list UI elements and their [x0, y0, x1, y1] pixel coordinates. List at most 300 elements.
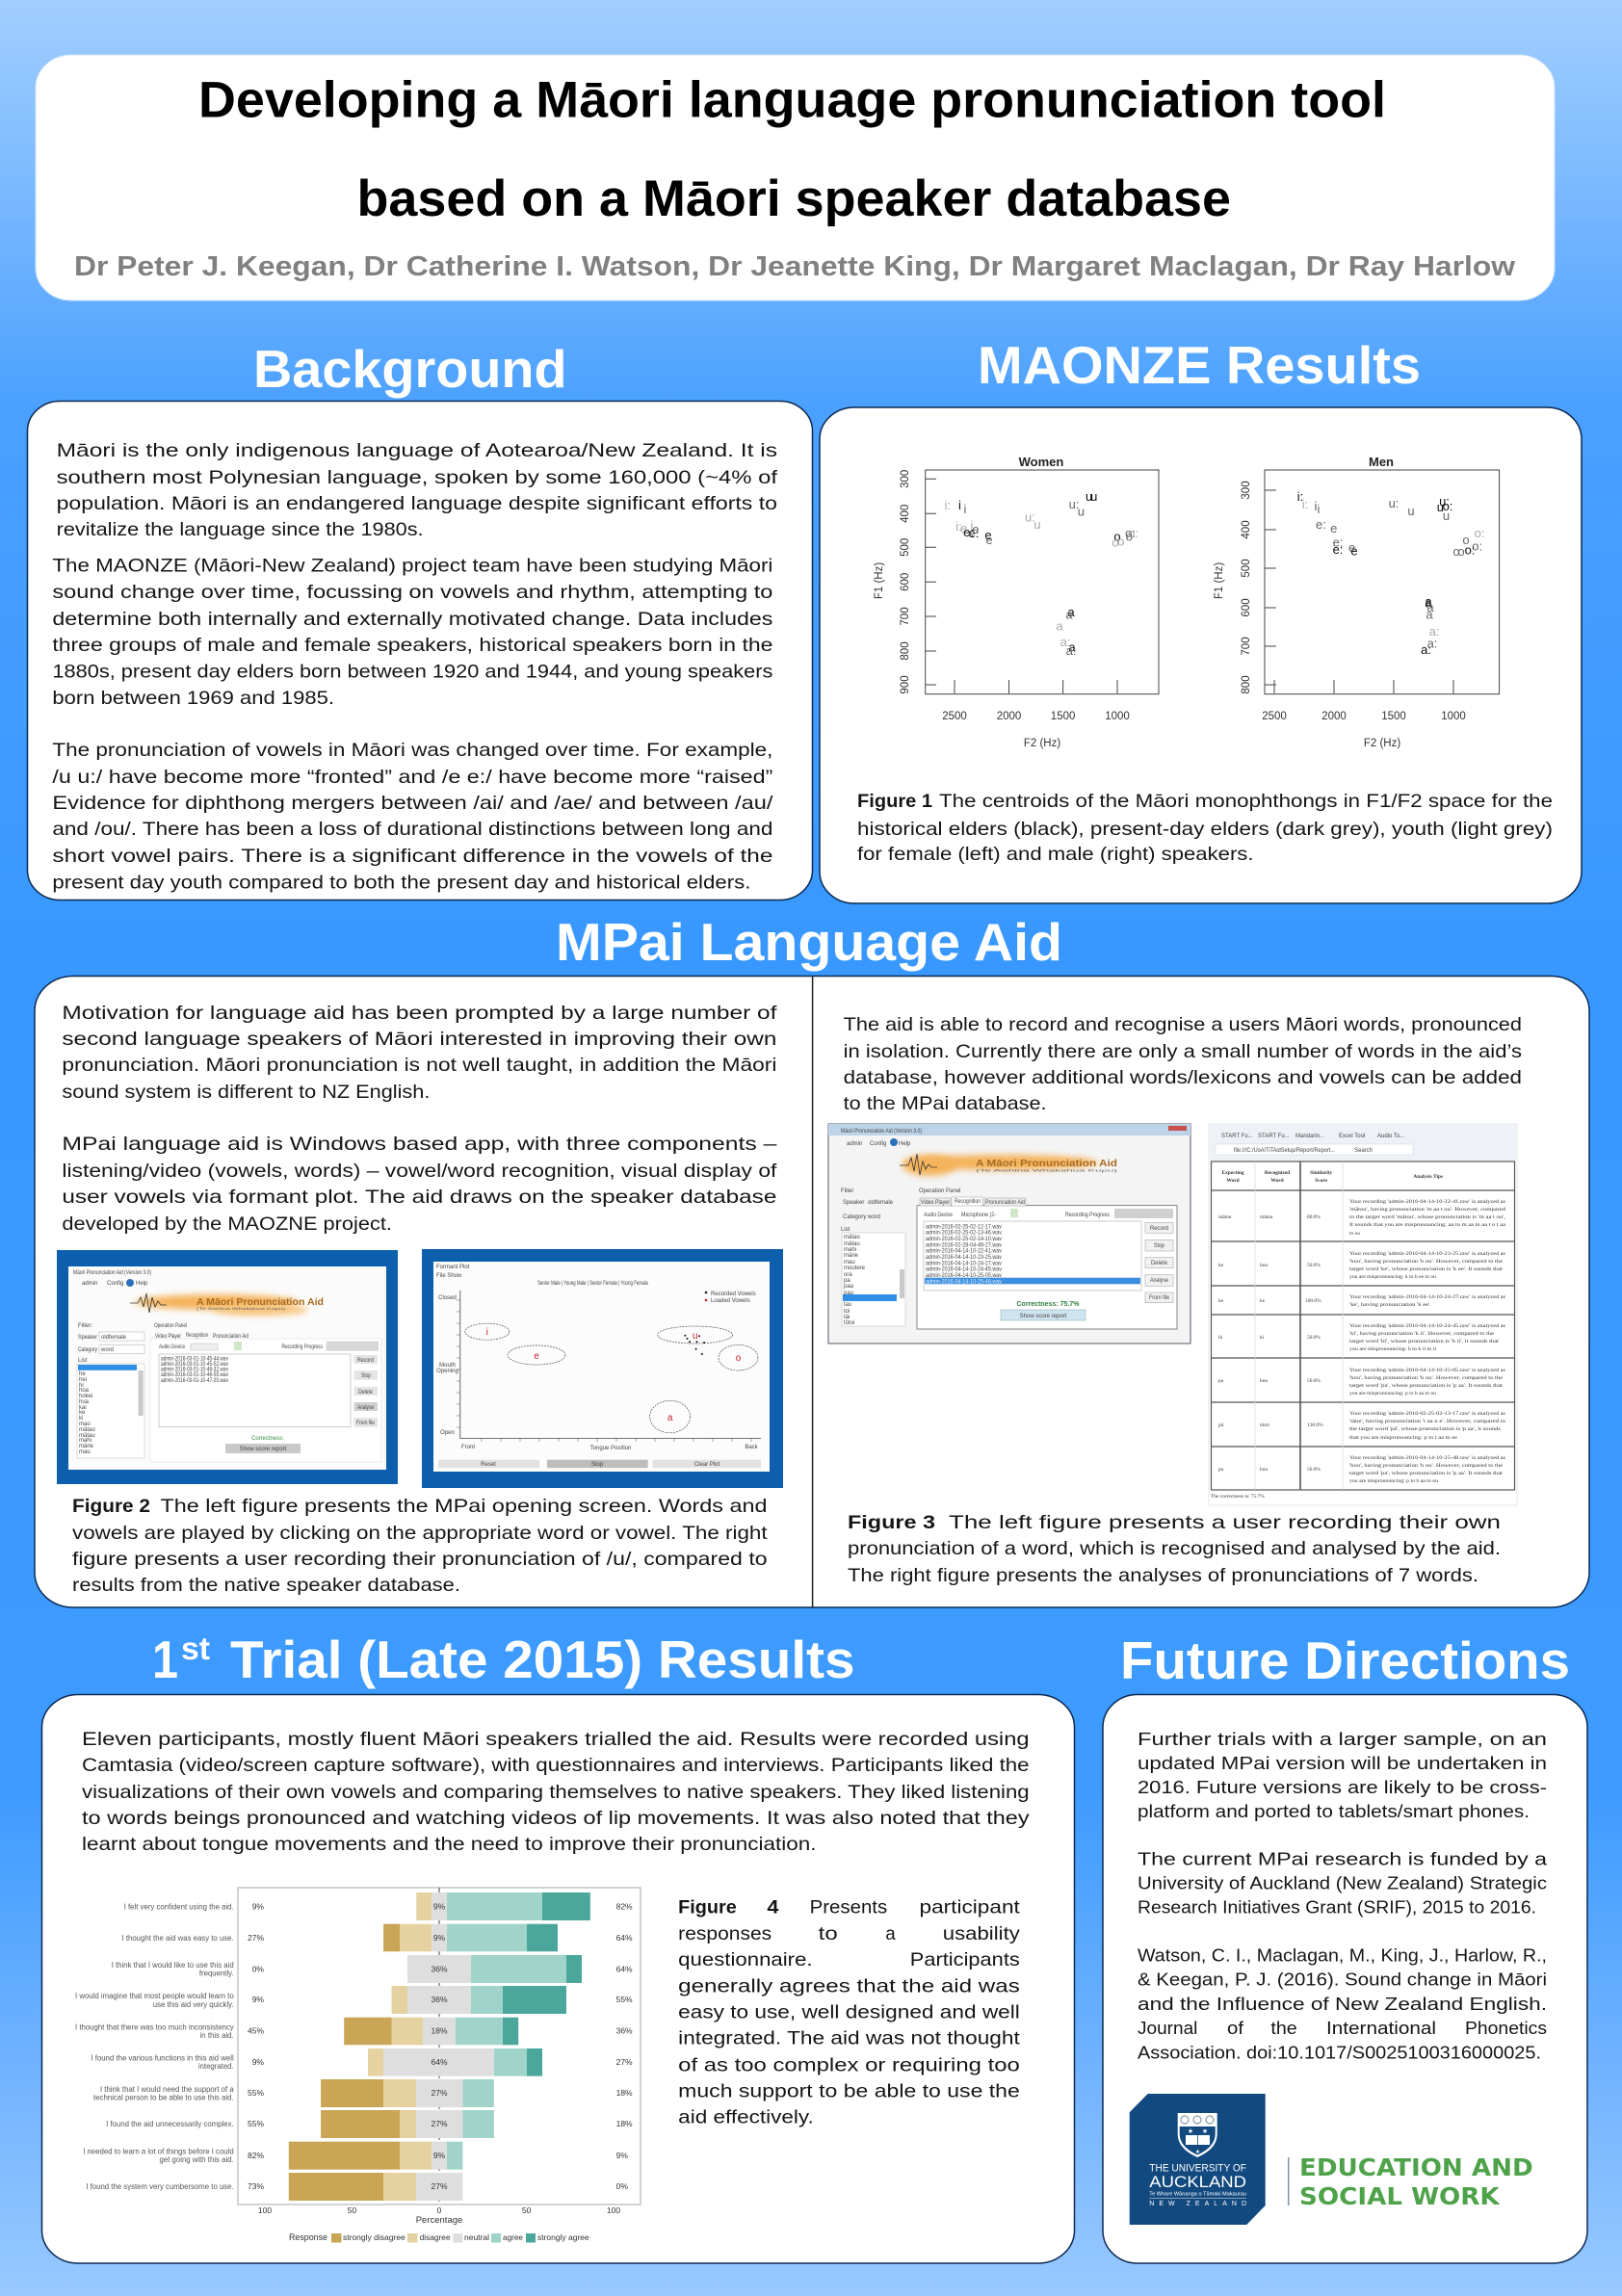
- screenshot: analysis report table: hou: [1260, 1263, 1268, 1268]
- screenshot: analysis report table: Excel Tool: [1339, 1134, 1365, 1139]
- screenshot: MPai opening screen: From file: [356, 1421, 376, 1426]
- axis row labels: in this aid.: [200, 2031, 234, 2040]
- screenshot: MPai opening screen: admin: [82, 1281, 97, 1287]
- percent labels: 64%: [431, 2057, 448, 2067]
- screenshot: formant plot: i: [486, 1327, 488, 1338]
- screenshot: recording window: tāi: [844, 1315, 850, 1320]
- heading: 1st Trial results: Trial (Late 2015) Results: [230, 1630, 855, 1689]
- screenshot: recording window: admin-2016-02-25-02-14-10.wav: [926, 1237, 1002, 1242]
- text: further trials: platform and ported to tablets/smart phones.: [1138, 1801, 1530, 1821]
- legend: strongly disagree: [343, 2232, 406, 2242]
- screenshot: formant plot: e: [534, 1351, 539, 1362]
- percent labels: 0%: [252, 1965, 264, 1974]
- chart: men vowel space: u: [1443, 509, 1450, 523]
- chart: women vowel space: 2000: [997, 711, 1021, 722]
- chart: women vowel space: a: [1056, 619, 1063, 634]
- caption: figure 2: [72, 1496, 768, 1596]
- screenshot: analysis report table: Audio To...: [1377, 1134, 1405, 1139]
- chart: women vowel space: u: [1086, 489, 1092, 504]
- chart: men vowel space: a: [1425, 594, 1432, 609]
- text: vowel change: /u u:/ have become more “fronted” and /e e:/ have become more “raised”: [52, 767, 772, 788]
- chart: men vowel space: u:: [1439, 494, 1450, 509]
- chart: women vowel space: a: [1068, 640, 1076, 655]
- chart: women vowel space: e: [960, 521, 967, 535]
- chart: women vowel space: u:: [1025, 510, 1035, 525]
- text: participants: Camtasia (video/screen capture software), with questionnaires and interviews. Participants liked the: [82, 1755, 1030, 1776]
- chart: women vowel space: u: [1078, 505, 1085, 519]
- screenshot: recording window: mahi: [844, 1247, 856, 1253]
- chart: men vowel space: 1500: [1381, 711, 1406, 722]
- screenshot: MPai opening screen: hua: [79, 1399, 90, 1405]
- caption: figure 4: aid effectively.: [678, 2106, 814, 2127]
- screenshot: recording window: mārie: [844, 1253, 859, 1259]
- text: MAONZE project: three groups of male and female speakers, historical speakers born in the: [52, 635, 772, 656]
- axis ticks: 0: [437, 2205, 442, 2215]
- screenshot: analysis report table: It sounds that you are mispronouncing: aa to m aa to aa t o t aa: [1349, 1222, 1506, 1228]
- screenshot: analysis report table: 50.0%: [1307, 1263, 1321, 1268]
- caption: figure 4: Figure: [678, 1897, 737, 1918]
- legend: strongly agree: [537, 2232, 589, 2242]
- screenshot: MPai opening screen: mārie: [79, 1444, 94, 1449]
- screenshot: MPai opening screen: admin-2016-03-01-10-46-32.wav: [161, 1368, 228, 1373]
- icon: crest: ★: [1202, 2127, 1208, 2135]
- screenshot: analysis report table: 50.0%: [1307, 1335, 1321, 1341]
- text: citation: Phonetics: [1465, 2018, 1547, 2038]
- screenshot: recording window: Config: [870, 1141, 886, 1147]
- screenshot: MPai opening screen: ki: [79, 1416, 83, 1422]
- screenshot: analysis report table: Recognized: [1265, 1170, 1290, 1176]
- screenshot: analysis report table: Your recording 'admin-2016-04-14-10-25-48.raw' is analyzed as: [1349, 1455, 1505, 1461]
- screenshot: MPai opening screen: Stop: [361, 1373, 372, 1379]
- chart: women vowel space: 500: [900, 538, 911, 557]
- screenshot: recording window: Video Player: [921, 1200, 950, 1206]
- caption: figure 4: generally agrees that the aid was: [678, 1976, 1020, 1997]
- screenshot: MPai opening screen: mau: [79, 1449, 91, 1455]
- screenshot: recording window: Operation Panel: [919, 1188, 960, 1194]
- percent labels: 36%: [431, 1995, 448, 2004]
- chart: women vowel space: 2500: [942, 711, 967, 722]
- screenshot: recording window: List: [841, 1227, 850, 1233]
- screenshot: MPai opening screen: A Māori Pronunciation Aid: [196, 1297, 324, 1308]
- screenshot: analysis report table: Word: [1226, 1178, 1240, 1184]
- caption: figure 4: easy to use, well designed and well: [678, 2002, 1020, 2023]
- text: further trials: Further trials with a larger sample, on an: [1138, 1729, 1547, 1749]
- screenshot: formant plot: Tongue Position: [590, 1446, 631, 1451]
- chart: women vowel space: o: [1126, 530, 1133, 544]
- percent labels: 55%: [248, 2088, 264, 2098]
- percent labels: 9%: [252, 1901, 264, 1911]
- heading: 1st Trial results: st: [181, 1631, 210, 1666]
- chart: men vowel space: o:: [1475, 526, 1484, 540]
- screenshot: MPai opening screen: admin-2016-03-01-10-47-20.wav: [161, 1378, 228, 1384]
- screenshot: MPai opening screen: [57, 1250, 398, 1484]
- percent labels: 55%: [248, 2119, 264, 2128]
- text: citation: the: [1270, 2018, 1297, 2038]
- screenshot: MPai opening screen: word: [100, 1347, 114, 1353]
- screenshot: MPai opening screen: Correctness:: [251, 1436, 284, 1442]
- legend: disagree: [420, 2232, 451, 2242]
- axis ticks: Percentage: [416, 2215, 462, 2226]
- chart: men vowel space: e: [1330, 521, 1337, 535]
- screenshot: formant plot: Senior Male | Young Male | Senior Female | Young Female: [537, 1281, 648, 1287]
- chart: men vowel space: a:: [1427, 637, 1437, 651]
- screenshot: analysis report table: 100.0%: [1305, 1298, 1321, 1304]
- text: participants: to words beings pronounced and watching videos of lip movements. It was also noted that they: [82, 1808, 1030, 1829]
- percent labels: 82%: [616, 1901, 633, 1911]
- chart: women vowel space: i: [964, 502, 967, 516]
- screenshot: recording window: Record: [1150, 1226, 1168, 1232]
- text: MAONZE project: determine both internally and externally motivated change. Data includes: [52, 609, 773, 630]
- screenshot: recording window: From file: [1149, 1295, 1170, 1301]
- screenshot: MPai opening screen: Operation Panel: [154, 1323, 187, 1329]
- text: further trials: updated MPai version will be undertaken in: [1138, 1753, 1547, 1773]
- text: citation: [1138, 1945, 1547, 2063]
- percent labels: 64%: [616, 1965, 633, 1974]
- caption: figure 4: much support to be able to use the: [678, 2080, 1020, 2101]
- screenshot: analysis report table: ke: [1218, 1298, 1224, 1304]
- screenshot: recording window: admin-2016-04-14-10-23-25.wav: [926, 1255, 1002, 1261]
- caption: figure 4: questionnaire.: [678, 1949, 813, 1970]
- caption: figure 1: Figure 1: [857, 791, 932, 812]
- text: citation: Association. doi:10.1017/S0025100316000025.: [1138, 2043, 1541, 2063]
- axis row labels: frequently.: [199, 1969, 234, 1978]
- screenshot: MPai opening screen: oldfemale: [101, 1335, 127, 1341]
- screenshot: recording window: admin-2016-04-14-10-24-27.wav: [926, 1261, 1002, 1266]
- chart: women vowel space: a:: [1066, 643, 1076, 658]
- text: citation: International: [1326, 2018, 1436, 2038]
- heading: MPai Language Aid: MPai Language Aid: [556, 912, 1062, 972]
- legend: agree: [503, 2232, 523, 2242]
- screenshot: MPai opening screen: Recognition: [186, 1333, 208, 1339]
- screenshot: analysis report table: mātou: [1218, 1214, 1232, 1220]
- screenshot: formant plot: Loaded Vowels: [711, 1298, 750, 1304]
- screenshot: analysis report table: Your recording 'admin-2016-04-14-10-23-25.raw' is analyzed as: [1349, 1251, 1505, 1257]
- legend: neutral: [464, 2232, 489, 2242]
- percent labels: [248, 1901, 633, 2191]
- screenshot: analysis report table: 130.0%: [1307, 1422, 1323, 1428]
- chart: women vowel space: i: [971, 518, 974, 533]
- screenshot: recording window: admin-2016-02-28-04-49-27.wav: [926, 1242, 1002, 1248]
- axis row labels: I found the various functions in this aid well: [91, 2053, 234, 2063]
- chart: women vowel space: e: [972, 522, 980, 536]
- screenshot: analysis report table: Expecting: [1221, 1170, 1244, 1176]
- screenshot: analysis report table: you are mispronouncing: p to h aa to ou: [1349, 1391, 1436, 1396]
- screenshot: MPai opening screen: Recording Progress: [281, 1344, 323, 1350]
- chart: women vowel space: F2 (Hz): [1024, 738, 1060, 749]
- screenshot: analysis report table: [1209, 1124, 1517, 1505]
- chart: women vowel space: 800: [900, 641, 911, 661]
- title: based on a Māori speaker database: [356, 170, 1231, 227]
- authors: Dr Peter J. Keegan, Dr Catherine I. Watson, Dr Jeanette King, Dr Margaret Maclagan, Dr Ray Harlow: [74, 251, 1515, 282]
- title: Developing a Māori language pronunciation tool: [198, 72, 1386, 129]
- screenshot: recording window: admin: [847, 1141, 862, 1147]
- screenshot: analysis report table: to the target word 'mātou', whose pronunciation is 'm aa t ou',: [1349, 1214, 1506, 1220]
- chart: men vowel space: a: [1426, 600, 1434, 614]
- chart: men vowel space: o:: [1472, 539, 1482, 554]
- screenshot: formant plot: u: [693, 1331, 697, 1342]
- chart: men vowel space: 700: [1241, 637, 1252, 656]
- percent labels: 0%: [616, 2181, 628, 2191]
- axis row labels: I think that I would like to use this aid: [112, 1961, 234, 1970]
- screenshot: analysis report table: START Fo...: [1258, 1134, 1290, 1139]
- caption: figure 3: Figure 3: [848, 1512, 935, 1533]
- panel: MAONZE results: [820, 407, 1582, 903]
- screenshot: recording window: Delete: [1151, 1261, 1168, 1266]
- chart: men vowel space: o: [1457, 544, 1465, 559]
- screenshot: MPai opening screen: Config: [107, 1281, 123, 1287]
- text: participants: visualizations of their own vowels and comparing themselves to native speakers. They liked listening: [82, 1782, 1030, 1803]
- chart: women vowel space: Women: [1019, 455, 1063, 469]
- screenshot: recording window: tau: [844, 1302, 851, 1308]
- screenshot: analysis report table: pa: [1218, 1378, 1224, 1384]
- axis row labels: I would imagine that most people would learn to: [75, 1992, 234, 2000]
- chart: women vowel space: 400: [900, 505, 911, 523]
- screenshot: analysis report table: hou: [1260, 1378, 1268, 1384]
- screenshot: recording window: A Māori Pronunciation Aid: [976, 1159, 1117, 1169]
- text: MAONZE project: sound change over time, focussing on vowels and rhythm, attempting to: [52, 582, 773, 603]
- chart: men vowel space: e: [1348, 540, 1355, 555]
- chart: men vowel space: e:: [1333, 542, 1343, 557]
- screenshot: MPai opening screen: Speaker: [78, 1335, 97, 1341]
- text: citation: Journal: [1138, 2018, 1197, 2038]
- caption: figure 1: historical elders (black), present-day elders (dark grey), youth (light grey): [857, 819, 1553, 840]
- screenshot: recording window: toi: [844, 1309, 850, 1315]
- percent labels: 55%: [616, 1995, 633, 2004]
- chart: men vowel space: e: [1350, 544, 1358, 559]
- screenshot: analysis report table: 'hou', having pronunciation 'h ou'. However, compared to the: [1349, 1463, 1504, 1469]
- chart: women vowel space: o:: [1128, 526, 1138, 540]
- chart: men vowel space: u: [1407, 504, 1415, 518]
- text: Māori language intro: [57, 440, 778, 540]
- axis row labels: I needed to learn a lot of things before I could: [83, 2148, 234, 2155]
- screenshot: formant plot: Formant Plot: [436, 1265, 470, 1270]
- percent labels: 82%: [248, 2151, 264, 2160]
- chart: women vowel space: u:: [1069, 497, 1079, 511]
- chart: men vowel space: 2000: [1321, 711, 1347, 722]
- screenshot: recording window: Māori Pronunciation Aid (Version 3.0): [841, 1129, 922, 1135]
- text: vowel change: Evidence for diphthong mergers between /ai/ and /ae/ and between /au/: [52, 793, 773, 814]
- screenshot: MPai opening screen: kai: [79, 1405, 87, 1411]
- text: participants: [82, 1729, 1030, 1855]
- screenshot: MPai opening screen: Audio Device: [159, 1344, 186, 1350]
- screenshot: analysis report table: 'mātou', having pronunciation 'm aa t ou'. However, compared: [1349, 1207, 1505, 1213]
- screenshot: recording window: [828, 1124, 1190, 1344]
- chart: women vowel space: a:: [1060, 635, 1070, 649]
- screenshot: MPai opening screen: (Te Awhina Whakahua Kupu): [196, 1307, 285, 1311]
- screenshot: analysis report table: Mandarin...: [1295, 1134, 1324, 1139]
- axis row labels: I thought that there was too much inconsistency: [75, 2022, 234, 2032]
- caption: figure 4: 4: [767, 1897, 779, 1918]
- chart: men vowel space: e:: [1333, 535, 1343, 550]
- axis row labels: I found the system very cumbersome to use.: [86, 2182, 234, 2191]
- text: app components: developed by the MAOZNE project.: [62, 1213, 392, 1235]
- legend: Response: [289, 2232, 327, 2242]
- screenshot: formant plot: Back: [745, 1445, 759, 1450]
- screenshot: recording window: admin-2016-04-14-10-25-05.wav: [926, 1273, 1002, 1279]
- chart: men vowel space: 300: [1241, 481, 1252, 500]
- chart: men vowel space: [1214, 455, 1500, 749]
- screenshot: analysis report table: ke: [1260, 1298, 1266, 1304]
- screenshot: recording window: Recognition: [955, 1199, 981, 1205]
- caption: figure 2: The left figure presents the MPai opening screen. Words and: [160, 1496, 767, 1517]
- chart: men vowel space: i: [1315, 499, 1318, 513]
- screenshot: analysis report table: Similarity: [1310, 1170, 1333, 1176]
- screenshot: formant plot: [422, 1249, 783, 1488]
- screenshot: recording window: admin-2016-02-25-02-13-46.wav: [926, 1231, 1002, 1237]
- screenshot: recording window: Microphone (2-: [961, 1213, 996, 1218]
- logo: University of Auckland: AUCKLAND: [1149, 2173, 1246, 2191]
- screenshot: MPai opening screen: mao: [79, 1422, 91, 1427]
- text: MAONZE project: [52, 556, 773, 709]
- text: participants: learnt about tongue movements and the need to improve their pronunciation.: [82, 1834, 816, 1855]
- text: motivation: [62, 1003, 777, 1103]
- chart: men vowel space: i:: [1302, 497, 1308, 511]
- legend: [289, 2232, 589, 2242]
- screenshot: MPai opening screen: mahi: [79, 1438, 92, 1444]
- text: funding: Research Initiatives Grant (SRIF), 2015 to 2016.: [1138, 1897, 1536, 1918]
- screenshot: recording window: Stop: [1154, 1243, 1165, 1249]
- text: motivation: second language speakers of Māori interested in improving their own: [62, 1029, 776, 1050]
- screenshot: recording window: Speaker: [843, 1200, 864, 1206]
- chart: women vowel space: u: [1090, 489, 1097, 504]
- screenshot: analysis report table: the target word 'pā', whose pronunciation is 'p aa', it sounds: [1349, 1426, 1501, 1432]
- percent labels: 9%: [433, 1933, 446, 1943]
- logo: Education and Social Work: [1289, 2153, 1533, 2210]
- screenshot: MPai opening screen: Delete: [358, 1390, 374, 1396]
- chart: women vowel space: e:: [969, 526, 979, 540]
- screenshot: analysis report table: pā: [1218, 1422, 1224, 1428]
- percent labels: 27%: [431, 2181, 448, 2191]
- text: citation: Watson, C. I., Maclagan, M., King, J., Harlow, R.,: [1138, 1945, 1547, 1966]
- chart: women vowel space: e: [985, 533, 993, 547]
- caption: figure 4: to: [819, 1923, 838, 1944]
- screenshot: analysis report table: ki: [1260, 1335, 1265, 1341]
- chart: women vowel space: i:: [944, 498, 951, 512]
- screenshot: MPai opening screen: hi: [79, 1383, 84, 1389]
- axis ticks: 100: [607, 2205, 620, 2215]
- caption: figure 4: participant: [919, 1897, 1020, 1918]
- title panel: [36, 55, 1555, 300]
- screenshot: recording window: paa: [844, 1284, 854, 1290]
- chart: women vowel space: e:: [963, 525, 974, 539]
- screenshot: analysis report table: that you are mispronouncing: p to t aa to ee: [1349, 1435, 1458, 1441]
- screenshot: formant plot: Reset: [481, 1462, 496, 1468]
- logo: University of Auckland: THE UNIVERSITY OF: [1149, 2162, 1246, 2174]
- screenshot: recording window: mātao: [844, 1235, 860, 1240]
- chart: men vowel space: F1 (Hz): [1214, 562, 1225, 599]
- screenshot: MPai opening screen: List: [78, 1358, 88, 1364]
- screenshot: analysis report table: you are mispronouncing: k to h ee to ou: [1349, 1274, 1436, 1280]
- chart: women vowel space: a: [1067, 605, 1075, 619]
- chart: usability likert bars: [75, 1888, 641, 2242]
- chart: women vowel space: [874, 455, 1159, 749]
- caption: figure 4: of as too complex or requiring too: [678, 2055, 1020, 2076]
- percent labels: 27%: [616, 2057, 633, 2067]
- screenshot: analysis report table: Word: [1270, 1178, 1284, 1184]
- text: citation: & Keegan, P. J. (2016). Sound change in Māori: [1138, 1970, 1547, 1990]
- logo: Education and Social Work: EDUCATION AND: [1299, 2153, 1533, 2181]
- caption: figure 2: vowels are played by clicking on the appropriate word or vowel. The right: [72, 1523, 768, 1544]
- caption: figure 4: usability: [943, 1923, 1020, 1944]
- caption: figure 4: a: [885, 1923, 896, 1944]
- screenshot: analysis report table: ke: [1218, 1263, 1224, 1268]
- percent labels: 27%: [248, 1933, 264, 1943]
- screenshot: MPai opening screen: admin-2016-03-01-10-45-44.wav: [161, 1357, 228, 1363]
- text: Māori language intro: population. Māori is an endangered language despite significant efforts to: [57, 493, 777, 514]
- screenshot: MPai opening screen: Analyse: [357, 1405, 375, 1411]
- chart: women vowel space: 300: [900, 470, 911, 488]
- percent labels: 9%: [252, 1995, 264, 2004]
- screenshot: analysis report table: Your recording 'admin-2016-04-14-10-22-41.raw' is analyzed as: [1349, 1199, 1505, 1205]
- logo: University of Auckland: [1130, 2094, 1266, 2225]
- text: funding: University of Auckland (New Zealand) Strategic: [1138, 1873, 1547, 1893]
- axis row labels: [75, 1903, 234, 2191]
- panel: future directions: [1103, 1695, 1587, 2263]
- screenshot: MPai opening screen: Pronunciation Aid: [213, 1334, 249, 1340]
- axis ticks: 50: [522, 2205, 532, 2215]
- screenshot: recording window: admin-2016-04-14-10-25-48.wav: [926, 1279, 1002, 1285]
- text: further trials: [1138, 1729, 1547, 1821]
- screenshot: analysis report table: you are mispronouncing: p to h aa to ou: [1349, 1478, 1438, 1484]
- text: app components: [62, 1134, 777, 1235]
- screenshot: analysis report table: 'hou', having pronunciation 'h ou'. However, compared to the: [1349, 1375, 1504, 1381]
- icon: crest: ★: [1188, 2127, 1193, 2135]
- chart: men vowel space: 2500: [1262, 711, 1287, 722]
- screenshot: recording window: tōtoi: [844, 1320, 854, 1326]
- screenshot: analysis report table: 'tāne', having pronunciation 't aa n e'. However, compared to: [1349, 1419, 1505, 1424]
- text: recognition: [844, 1014, 1522, 1114]
- chart: women vowel space: F1 (Hz): [874, 562, 885, 599]
- chart: women vowel space: o: [1113, 530, 1121, 544]
- screenshot: analysis report table: 50.0%: [1307, 1378, 1321, 1384]
- screenshot: MPai opening screen: Video Player: [155, 1334, 181, 1340]
- screenshot: analysis report table: 80.0%: [1307, 1214, 1321, 1220]
- screenshot: recording window: Audio Device: [924, 1213, 954, 1218]
- screenshot: recording window: mātau: [844, 1241, 860, 1247]
- text: Māori language intro: southern most Polynesian language, spoken by some 160,000 (~4% of: [57, 467, 778, 488]
- percent labels: 73%: [248, 2181, 264, 2191]
- panel: trial results: [42, 1695, 1075, 2263]
- text: further trials: 2016. Future versions are likely to be cross-: [1138, 1777, 1547, 1797]
- text: app components: MPai language aid is Windows based app, with three components –: [62, 1134, 777, 1155]
- chart: women vowel space: i: [958, 498, 961, 512]
- screenshot: formant plot: Mouth: [439, 1363, 456, 1369]
- screenshot: MPai opening screen: Help: [136, 1281, 148, 1287]
- axis ticks: 100: [258, 2205, 272, 2215]
- screenshot: formant plot: Open: [440, 1430, 455, 1436]
- screenshot: recording window: ora: [844, 1272, 852, 1278]
- caption: figure 1: for female (left) and male (right) speakers.: [857, 844, 1254, 865]
- caption: figure 3: [848, 1512, 1501, 1586]
- screenshot: analysis report table: Your recording 'admin-2016-04-14-10-25-05.raw' is analyzed as: [1349, 1368, 1505, 1373]
- screenshot: analysis report table: 'hou', having pronunciation 'h ou'. However, compared to the: [1349, 1259, 1504, 1265]
- screenshot: analysis report table: target word 'pa', whose pronunciation is 'p aa'. It sounds that: [1349, 1471, 1504, 1476]
- screenshot: formant plot: File Show: [436, 1273, 462, 1279]
- screenshot: MPai opening screen: mātao: [79, 1427, 95, 1433]
- screenshot: recording window: Pronunciation Aid: [985, 1200, 1025, 1206]
- text: app components: user vowels via formant plot. The aid draws on the speaker database: [62, 1187, 776, 1208]
- screenshot: analysis report table: The correctness is: 75.7%: [1211, 1494, 1265, 1500]
- chart: women vowel space: e: [984, 528, 992, 542]
- text: Māori language intro: revitalize the language since the 1980s.: [57, 519, 424, 540]
- screenshot: MPai opening screen: Category: [78, 1347, 97, 1353]
- chart: men vowel space: u: [1437, 500, 1444, 514]
- text: MAONZE project: The MAONZE (Māori-New Zealand) project team have been studying Māori: [52, 556, 772, 577]
- chart: men vowel space: F2 (Hz): [1364, 738, 1400, 749]
- logo: University of Auckland: Te Whare Wānanga o Tāmaki Makaurau: [1149, 2191, 1246, 2197]
- heading: MAONZE Results: MAONZE Results: [978, 335, 1421, 395]
- screenshot: formant plot: Closed: [438, 1295, 457, 1301]
